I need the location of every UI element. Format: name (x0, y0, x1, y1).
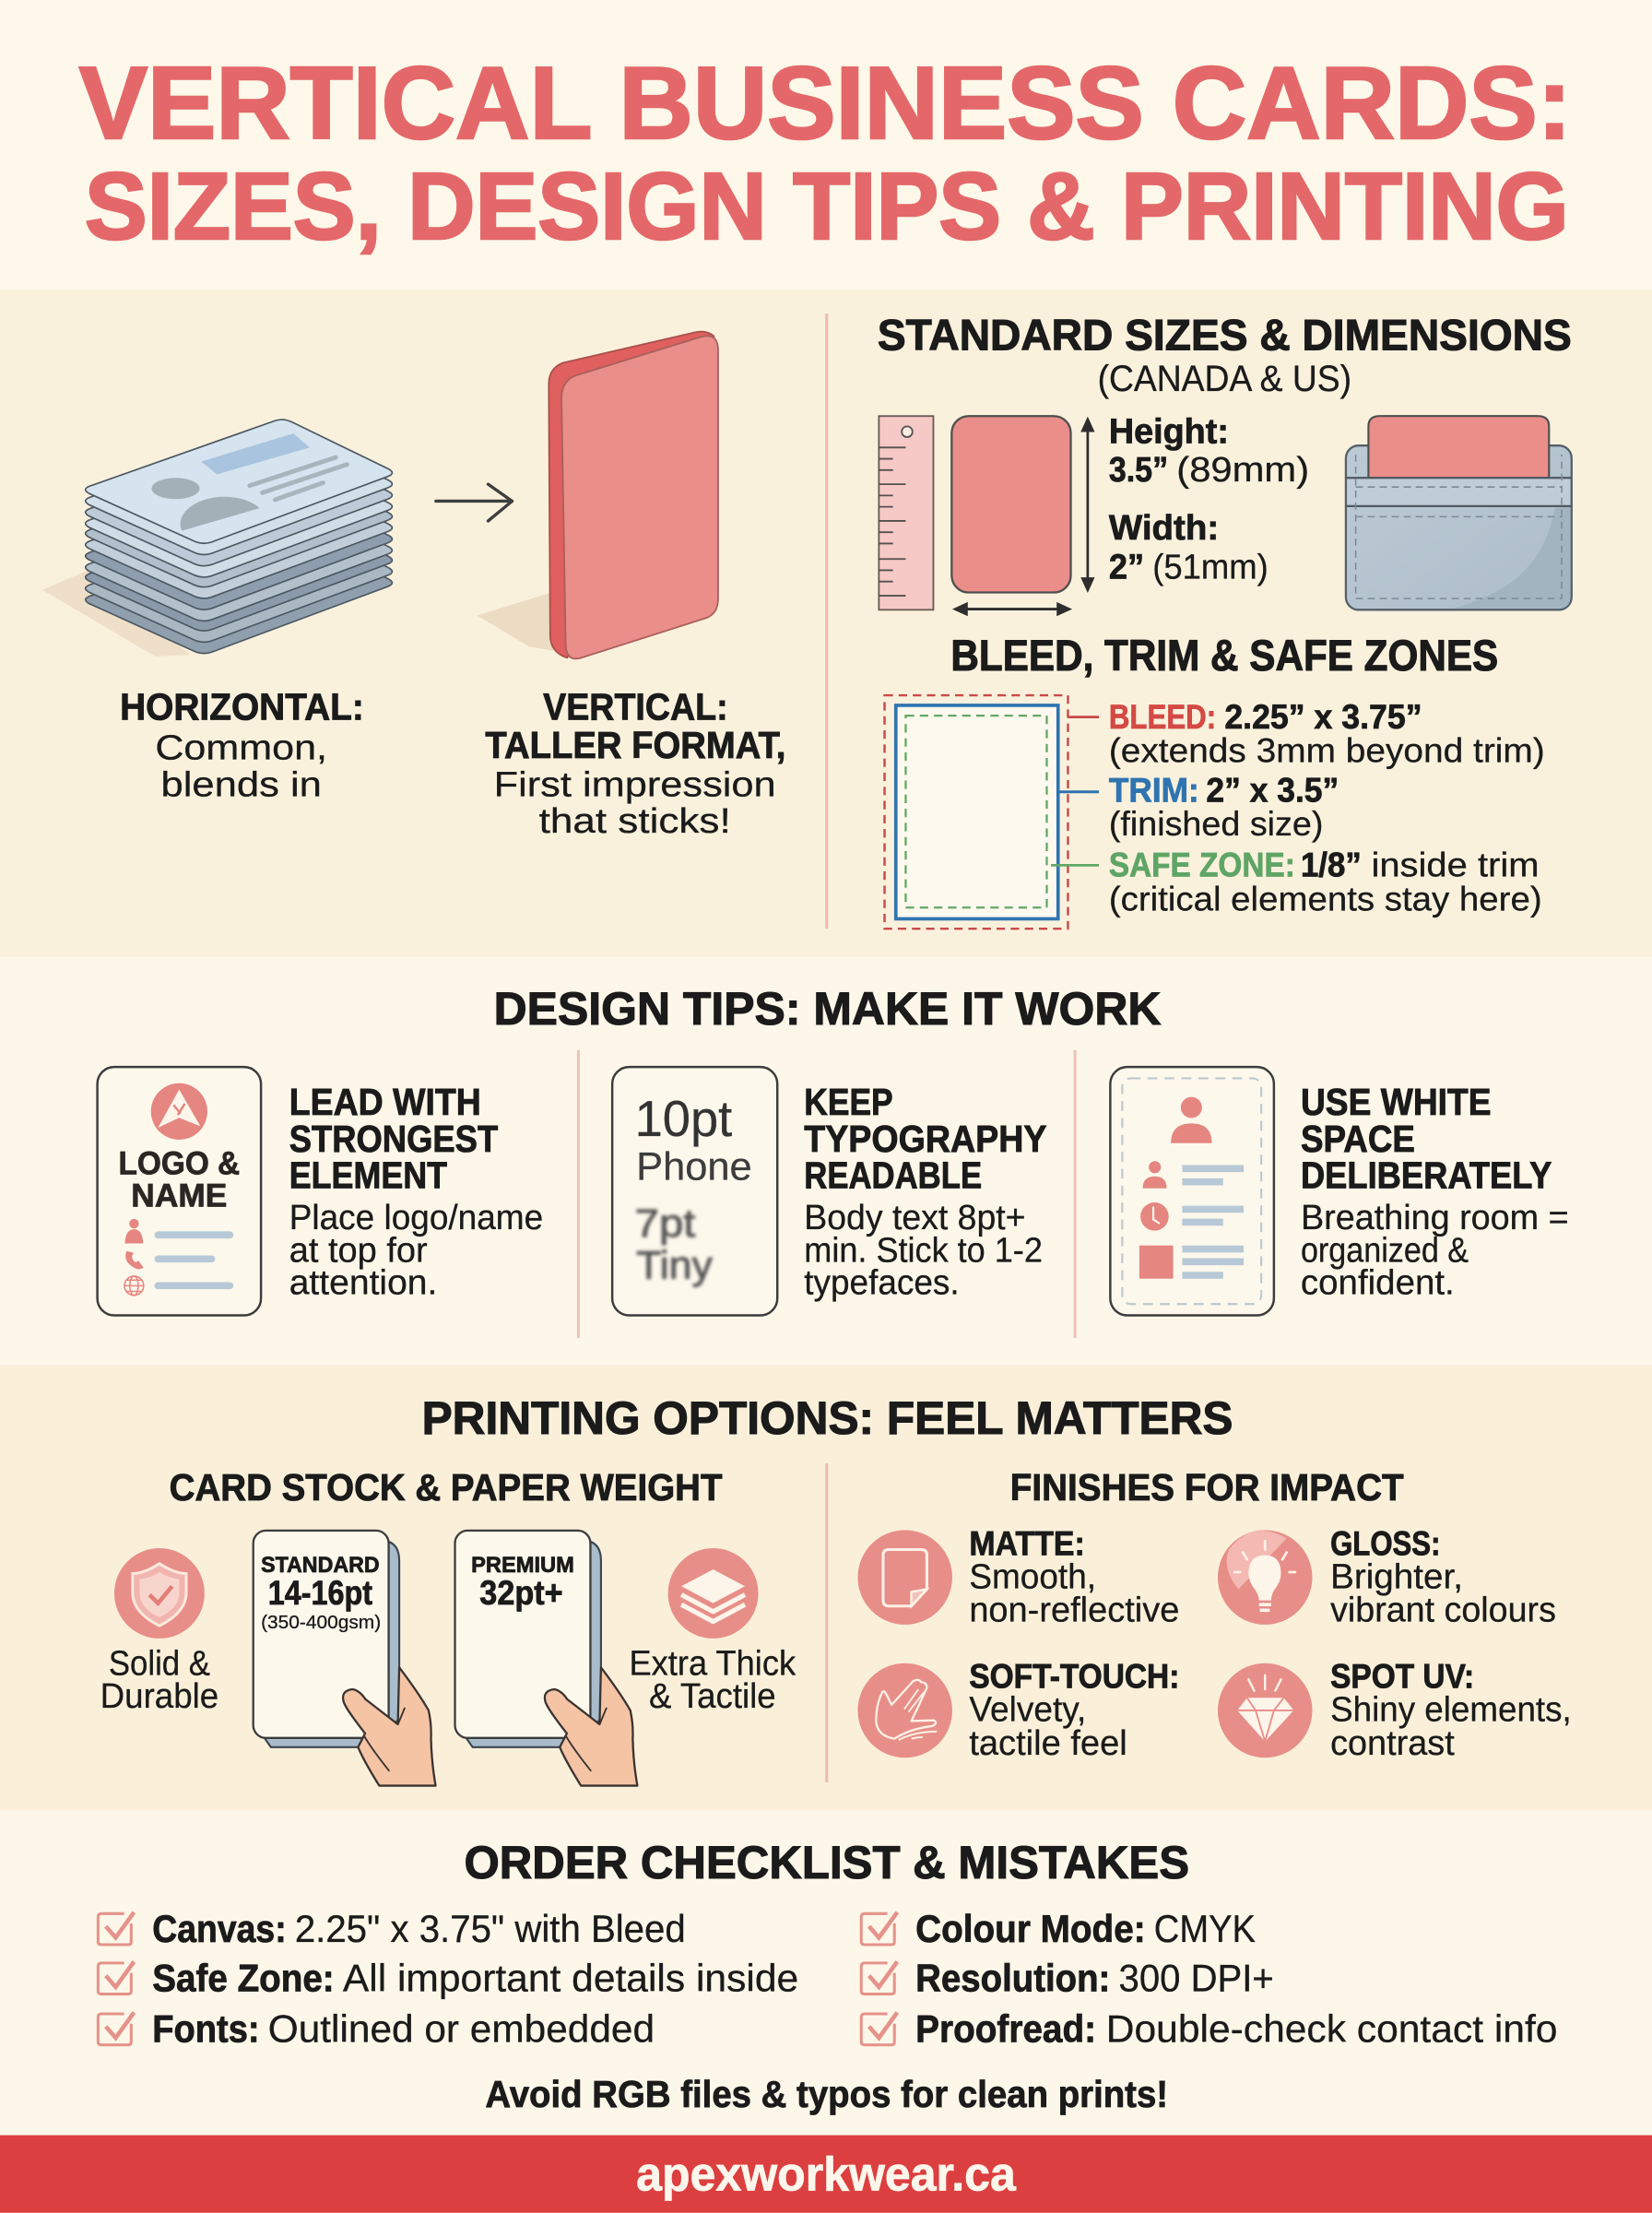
text: soft touch: tactile feel (969, 1723, 1127, 1763)
text: solid and durable (100, 1644, 218, 1716)
icon: typography sizes card: 10pt (635, 1090, 732, 1147)
footer bar (0, 2136, 1652, 2213)
text: horizontal label: HORIZONTAL: (120, 686, 364, 728)
text: height and width: Height: (1109, 412, 1229, 452)
checklist item: resolution (861, 1958, 1274, 2000)
text: extra thick: & Tactile (649, 1676, 776, 1716)
text: height and width: 2” (1109, 548, 1144, 587)
checklist item: colour mode (861, 1908, 1256, 1950)
icon: matte (857, 1530, 952, 1625)
text: bleed trim safe legend (1109, 697, 1545, 917)
title (79, 45, 1572, 259)
text: gloss: Brighter, (1330, 1557, 1463, 1597)
text: bleed trim safe legend: (extends 3mm beyond trim) (1109, 731, 1545, 770)
tip: keep typography readable: KEEP (804, 1081, 893, 1123)
icon: premium card held in hand: 32pt+ (479, 1574, 563, 1612)
tip: keep typography readable: min. Stick to 1-2 (804, 1230, 1043, 1270)
heading: printing options: PRINTING OPTIONS: FEEL MATTERS (422, 1391, 1233, 1444)
icon: soft touch (857, 1663, 952, 1757)
icon: standard card held in hand (254, 1531, 436, 1786)
text: bleed trim safe legend: BLEED: (1109, 697, 1216, 736)
icon: wallet with card (1346, 416, 1572, 609)
arrow: horizontal to vertical (436, 484, 513, 521)
diagram: bleed trim safe zones (885, 695, 1099, 929)
checklist item: fonts: Outlined or embedded (268, 2008, 655, 2051)
text: vertical label: First impression (494, 764, 776, 804)
text: bleed trim safe legend: SAFE ZONE: (1109, 846, 1295, 884)
icon: layers (668, 1548, 759, 1639)
icon: typography sizes card: Tiny (636, 1244, 713, 1288)
text: spot uv: contrast (1330, 1723, 1455, 1763)
text: height and width (1109, 412, 1309, 587)
tip: keep typography readable: typefaces. (804, 1263, 960, 1303)
tip: keep typography readable: Body text 8pt+ (804, 1198, 1026, 1237)
text: vertical label: TALLER FORMAT, (485, 724, 785, 766)
tip: lead with strongest element (289, 1081, 543, 1303)
footer bar: apexworkwear.ca (636, 2148, 1017, 2201)
icon: typography sizes card: Phone (636, 1145, 752, 1189)
icon: spot uv diamond (1218, 1663, 1312, 1757)
tip: use white space: SPACE (1301, 1118, 1415, 1160)
heading: finishes: FINISHES FOR IMPACT (1010, 1466, 1404, 1509)
tip: keep typography readable: READABLE (804, 1154, 982, 1197)
text: bleed trim safe legend: inside trim (1371, 846, 1540, 884)
text: height and width: (89mm) (1176, 450, 1309, 490)
text: bleed trim safe legend: TRIM: (1109, 770, 1199, 809)
tip: lead with strongest element: LEAD WITH (289, 1081, 481, 1123)
heading: card stock: CARD STOCK & PAPER WEIGHT (170, 1466, 723, 1509)
text: gloss: vibrant colours (1330, 1591, 1556, 1630)
text: spot uv (1330, 1657, 1572, 1763)
tip: lead with strongest element: Place logo/name (289, 1198, 543, 1237)
icon: standard card held in hand: STANDARD (261, 1553, 380, 1578)
text: bleed trim safe legend: 2.25” x 3.75” (1224, 697, 1422, 736)
text: height and width: (51mm) (1152, 548, 1268, 587)
checklist item: fonts: Fonts: (152, 2008, 260, 2051)
text: horizontal label: Common, (155, 728, 327, 768)
icon: gloss (1218, 1530, 1312, 1625)
icon: vertical card (477, 332, 718, 658)
checklist item: safe zone (98, 1958, 798, 2000)
text: spot uv: SPOT UV: (1330, 1657, 1474, 1695)
text: bleed trim safe legend: 2” x 3.5” (1206, 770, 1339, 809)
text: vertical label: VERTICAL: (543, 686, 728, 728)
panel: design tips background (0, 957, 1652, 1365)
tip: keep typography readable (804, 1081, 1046, 1303)
checklist item: fonts (98, 2008, 655, 2051)
checklist item: canvas (98, 1908, 686, 1950)
icon: stack of horizontal cards (42, 420, 392, 657)
icon: white space card (1110, 1067, 1274, 1315)
text: horizontal label: blends in (160, 764, 322, 804)
checklist item: safe zone: Safe Zone: (152, 1958, 335, 2000)
icon: ruler (879, 416, 933, 609)
checklist item: proofread: Double-check contact info (1106, 2008, 1557, 2051)
icon: standard card held in hand: (350-400gsm) (261, 1612, 381, 1633)
text: bleed trim safe legend: (finished size) (1109, 804, 1323, 843)
callout: avoid RGB: Avoid RGB files & typos for clean prints! (485, 2073, 1168, 2115)
text: height and width: 3.5” (1109, 450, 1168, 490)
text: horizontal label (120, 686, 364, 804)
text: soft touch: SOFT-TOUCH: (969, 1657, 1179, 1695)
heading: order checklist: ORDER CHECKLIST & MISTAKES (464, 1836, 1189, 1888)
panel: checklist background (0, 1811, 1652, 2136)
icon: shield (114, 1548, 205, 1639)
text: extra thick: Extra Thick (630, 1644, 796, 1684)
icon: card with dimension arrows (951, 416, 1095, 616)
heading: bleed trim safe: BLEED, TRIM & SAFE ZONES (950, 632, 1498, 680)
text: matte: MATTE: (969, 1525, 1085, 1563)
tip: use white space (1301, 1081, 1569, 1303)
text: solid and durable: Solid & (109, 1644, 210, 1684)
text: vertical label (485, 686, 785, 841)
panel: comparison and dimensions background (0, 290, 1652, 957)
tip: lead with strongest element: ELEMENT (289, 1154, 447, 1197)
tip: use white space: DELIBERATELY (1301, 1154, 1552, 1197)
heading: standard sizes: (CANADA & US) (1098, 359, 1351, 399)
text: height and width: Width: (1109, 508, 1219, 548)
icon: typography sizes card (612, 1067, 777, 1315)
title: SIZES, DESIGN TIPS & PRINTING (85, 152, 1569, 259)
tip: keep typography readable: TYPOGRAPHY (804, 1118, 1046, 1160)
checklist item: proofread: Proofread: (915, 2008, 1096, 2051)
tip: lead with strongest element: at top for (289, 1230, 428, 1270)
checklist item: canvas: 2.25" x 3.75" with Bleed (295, 1908, 686, 1950)
checklist item: canvas: Canvas: (152, 1908, 287, 1950)
text: soft touch (969, 1657, 1179, 1763)
checklist item: safe zone: All important details inside (343, 1958, 798, 2000)
text: solid and durable: Durable (100, 1676, 218, 1716)
text: bleed trim safe legend: (critical elements stay here) (1109, 879, 1542, 917)
icon: premium card held in hand (455, 1531, 637, 1786)
icon: logo and name card: NAME (131, 1178, 227, 1214)
text: soft touch: Velvety, (969, 1690, 1086, 1730)
text: extra thick (630, 1644, 796, 1716)
icon: logo and name card: LOGO & (119, 1145, 240, 1181)
checklist item: resolution: 300 DPI+ (1119, 1958, 1274, 2000)
tip: lead with strongest element: attention. (289, 1263, 437, 1303)
tip: use white space: USE WHITE (1301, 1081, 1492, 1123)
heading: standard sizes: STANDARD SIZES & DIMENSIONS (878, 312, 1572, 361)
icon: premium card held in hand: PREMIUM (471, 1553, 574, 1578)
text: matte: non-reflective (969, 1591, 1179, 1630)
checklist item: proofread (861, 2008, 1557, 2051)
text: matte: Smooth, (969, 1557, 1096, 1597)
text: bleed trim safe legend: 1/8” (1301, 846, 1362, 884)
text: spot uv: Shiny elements, (1330, 1690, 1572, 1730)
tip: lead with strongest element: STRONGEST (289, 1118, 498, 1160)
checklist item: resolution: Resolution: (915, 1958, 1110, 2000)
panel: printing options background (0, 1365, 1652, 1811)
icon: typography sizes card: 7pt (635, 1201, 696, 1246)
icon: logo and name card (98, 1067, 261, 1315)
text: vertical label: that sticks! (539, 801, 731, 841)
text: gloss (1330, 1525, 1556, 1630)
title: VERTICAL BUSINESS CARDS: (79, 45, 1572, 160)
checklist item: colour mode: CMYK (1154, 1908, 1256, 1950)
tip: use white space: Breathing room = (1301, 1198, 1569, 1237)
text: gloss: GLOSS: (1330, 1525, 1440, 1563)
icon: standard card held in hand: 14-16pt (268, 1574, 372, 1612)
heading: design tips: DESIGN TIPS: MAKE IT WORK (494, 982, 1161, 1035)
tip: use white space: organized & (1301, 1230, 1469, 1270)
heading: standard sizes (878, 312, 1572, 399)
tip: use white space: confident. (1301, 1263, 1455, 1303)
text: matte (969, 1525, 1179, 1630)
checklist item: colour mode: Colour Mode: (915, 1908, 1146, 1950)
